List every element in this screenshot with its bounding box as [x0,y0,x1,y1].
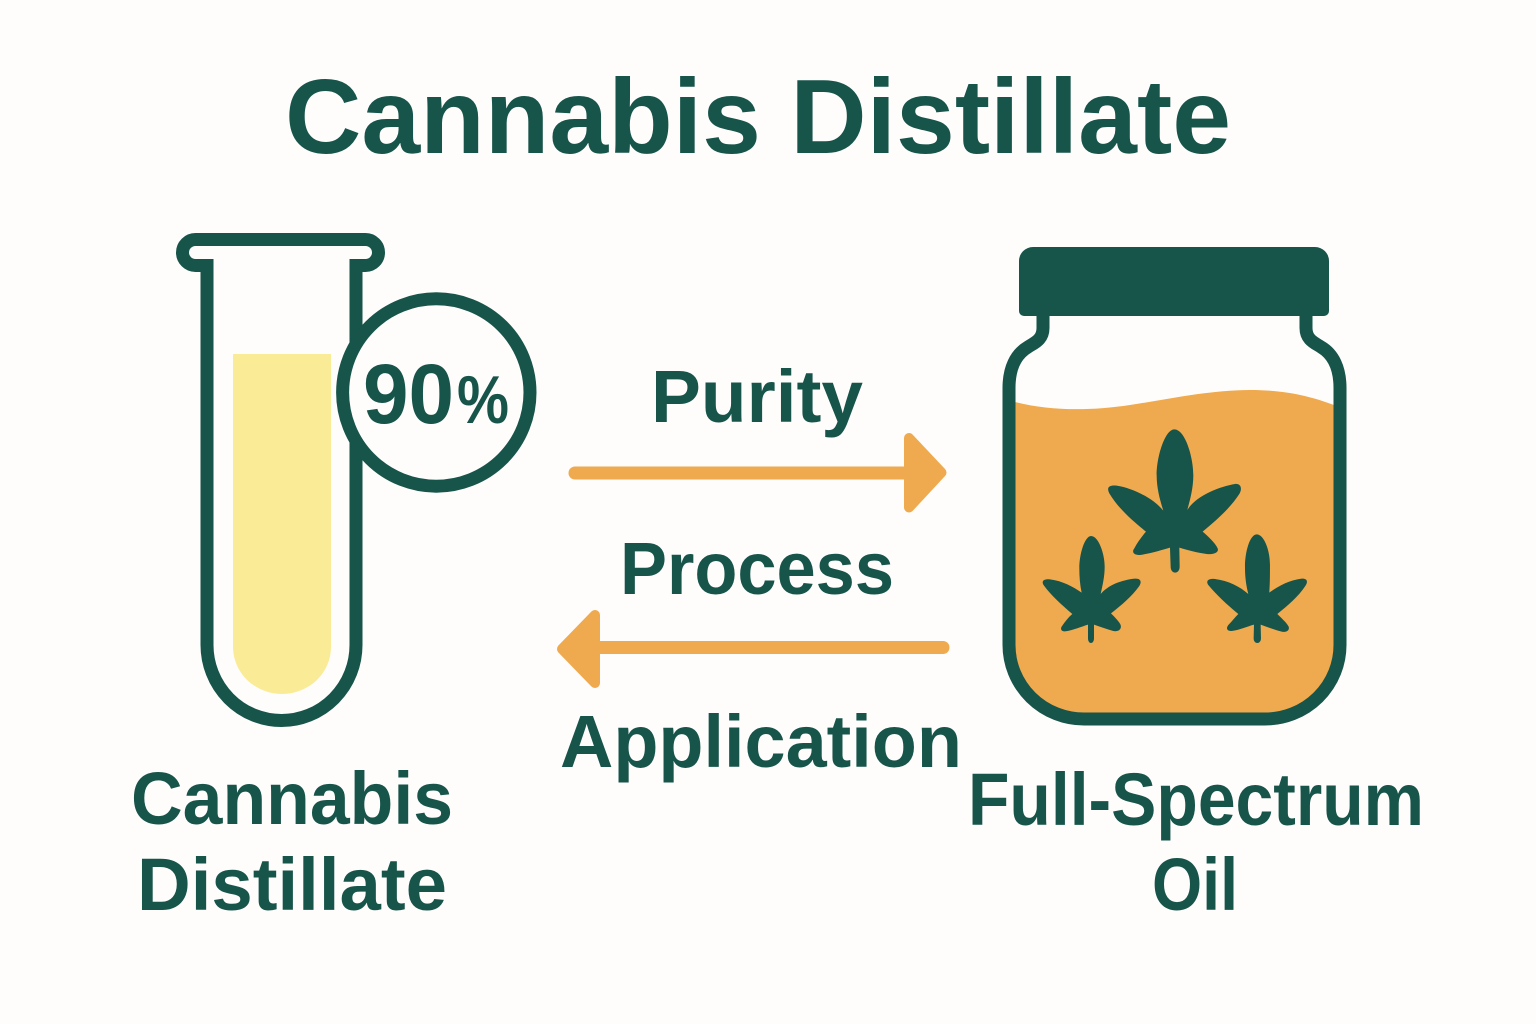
jar outline [1009,312,1340,719]
arrow: left [562,615,943,683]
label: Cannabis Distillate: Distillate [137,843,447,926]
jar oil [1015,390,1334,713]
label: Application: Application [560,700,962,783]
badge: 90%: 90 [363,347,454,441]
label: Process: Process [620,527,894,610]
icon: jar [1009,247,1340,719]
label: Cannabis Distillate: Cannabis [131,757,453,840]
jar lid [1019,247,1329,316]
icon: test tube [182,240,378,720]
tube outline [182,240,378,720]
label: Purity: Purity [651,355,863,438]
arrow: right [575,438,942,508]
label: Cannabis Distillate [131,757,453,926]
label: Full-Spectrum Oil: Oil [1152,843,1238,926]
icon: left leaf [1043,536,1141,643]
badge: 90% [343,299,530,486]
icon: right leaf [1207,534,1307,643]
tube liquid [233,354,331,694]
label: Full-Spectrum Oil: Full-Spectrum [968,758,1424,841]
title: Cannabis Distillate [285,58,1231,176]
label: Full-Spectrum Oil [968,758,1424,926]
badge: 90%: % [457,362,509,438]
icon: large leaf [1108,429,1241,573]
